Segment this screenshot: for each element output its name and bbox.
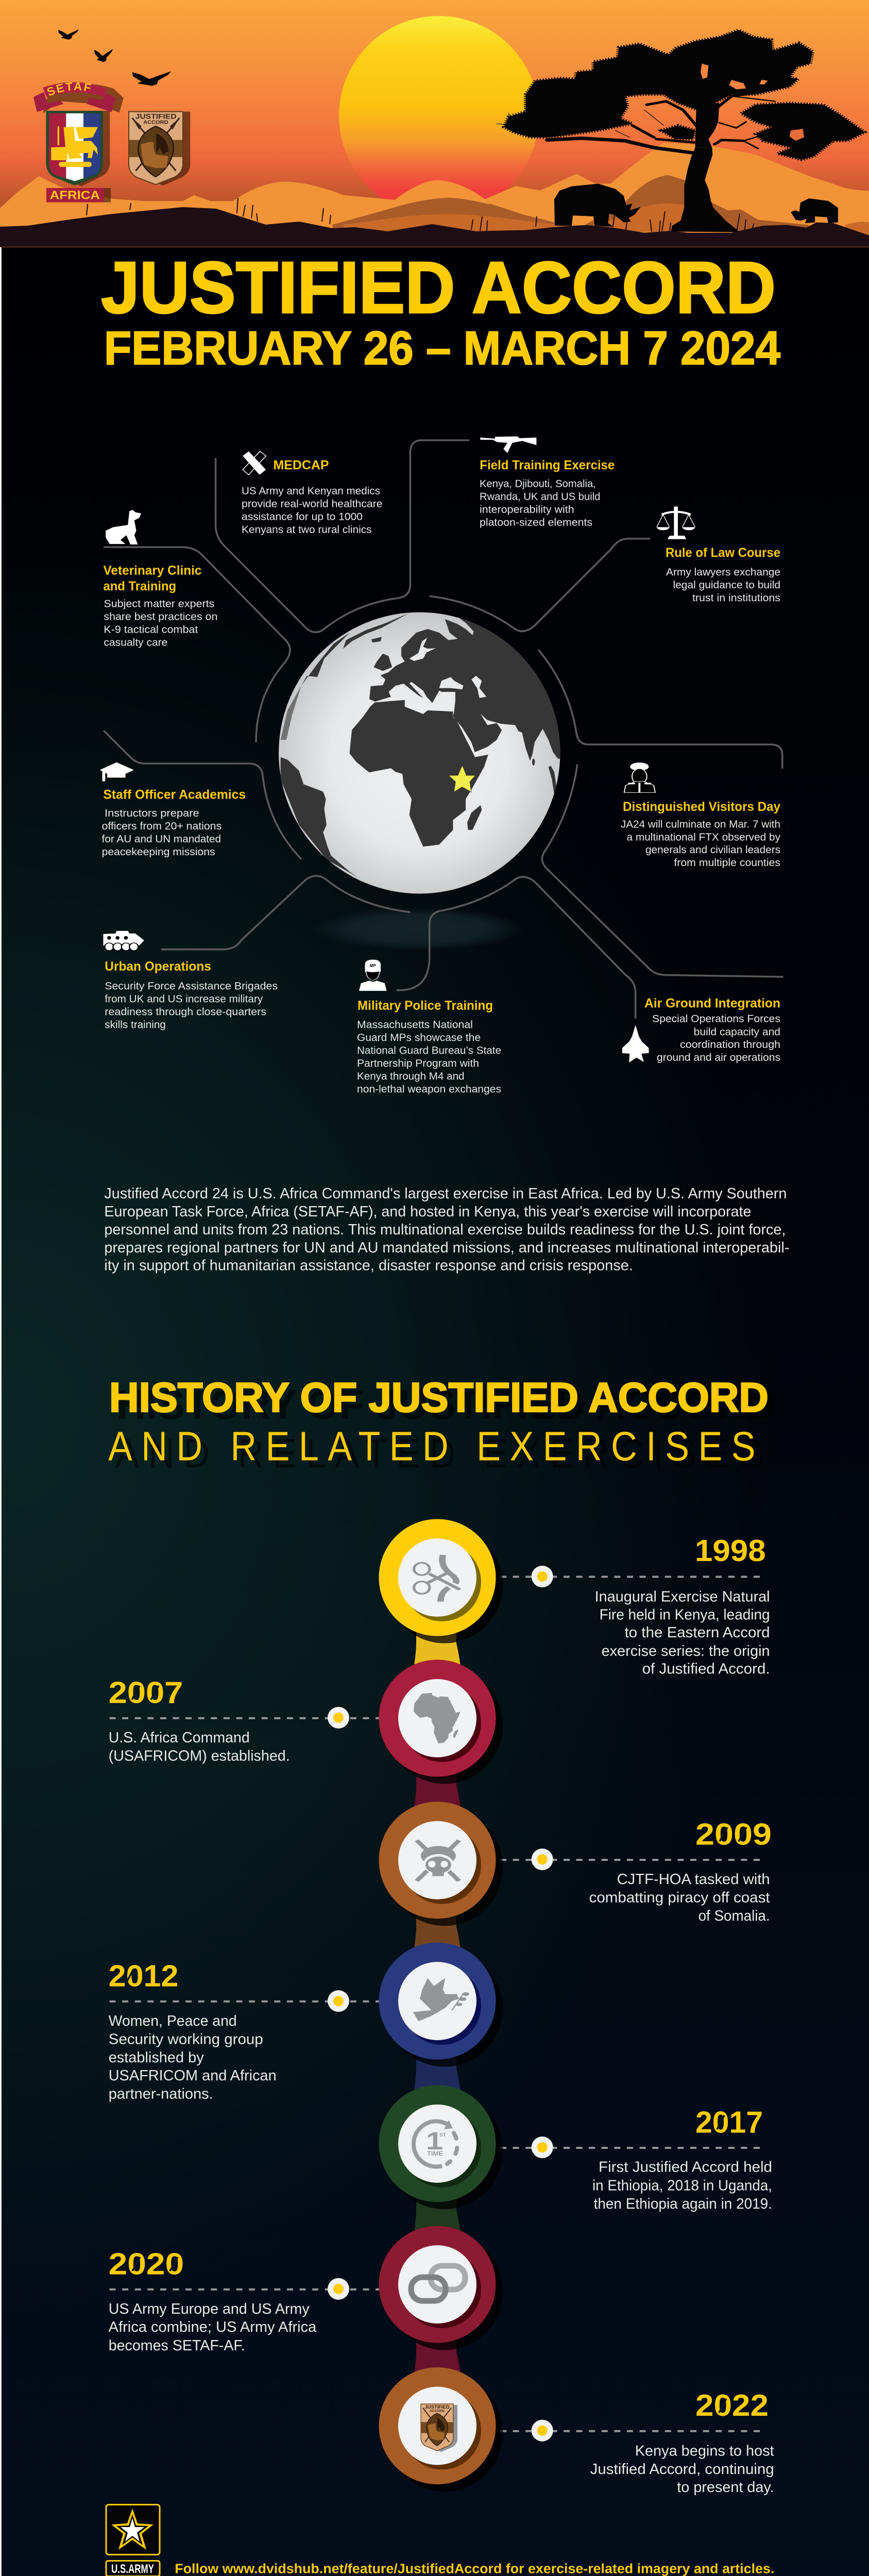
icon: armored vehicle xyxy=(103,931,144,951)
activity: Rule of Law Course: Army lawyers exchange xyxy=(666,567,780,578)
sun xyxy=(339,16,539,216)
activity: Field Training Exercise: Field Training Exercise xyxy=(480,458,615,472)
activity: Urban Operations: readiness through close-quarters xyxy=(105,1007,266,1018)
activity: MEDCAP: US Army and Kenyan medics xyxy=(242,485,380,497)
icon: first time arrow: 1 xyxy=(426,2128,443,2155)
timeline node: 2017 first time xyxy=(379,2085,503,2209)
timeline node: 2020 chain xyxy=(379,2226,503,2350)
tree and rhinos xyxy=(497,30,864,232)
inland seas xyxy=(410,638,486,698)
title xyxy=(101,247,780,375)
activity: Field Training Exercise: interoperability with xyxy=(480,504,574,516)
tree xyxy=(497,30,864,232)
activity: Rule of Law Course xyxy=(657,506,780,604)
icon: officer xyxy=(624,762,655,792)
grass xyxy=(87,198,754,232)
activity: Field Training Exercise: Rwanda, UK and US build xyxy=(480,492,600,503)
activity: Air Ground Integration: coordination through xyxy=(680,1039,780,1050)
timeline event: 2020: Africa combine; US Army Africa xyxy=(109,2319,317,2335)
timeline event: 2012: Women, Peace and xyxy=(109,2013,237,2029)
activity: Military Police Training: non-lethal weapon exchanges xyxy=(357,1083,501,1095)
timeline event: 2017 xyxy=(500,2106,772,2212)
Madagascar xyxy=(467,805,482,830)
US Army logo: U.S.ARMY xyxy=(111,2562,154,2576)
timeline event: 2007: (USAFRICOM) established. xyxy=(109,1748,290,1765)
header sunset illustration xyxy=(0,0,869,247)
activity: Veterinary Clinic and Training xyxy=(103,510,217,649)
timeline event: 2022: 2022 xyxy=(695,2388,769,2422)
timeline event: 2009: combatting piracy off coast xyxy=(589,1890,770,1906)
timeline node: 2007 Africa xyxy=(379,1660,503,1784)
timeline event: 2022: Justified Accord, continuing xyxy=(590,2461,774,2478)
Sri Lanka and Sumatra xyxy=(532,758,535,766)
icon: rifle xyxy=(480,436,536,453)
icon: first time arrow: ST xyxy=(439,2132,446,2138)
activity: Distinguished Visitors Day xyxy=(621,762,780,869)
timeline event: 1998: of Justified Accord. xyxy=(642,1661,770,1677)
South America xyxy=(281,757,359,878)
activity: MEDCAP: MEDCAP xyxy=(273,458,329,472)
timeline node: 1998 scissors xyxy=(379,1519,503,1643)
timeline event: 2017: First Justified Accord held xyxy=(599,2159,772,2176)
activity: Veterinary Clinic and Training: Veterinary Clinic xyxy=(103,564,202,578)
icon: military police officer xyxy=(359,960,387,991)
timeline event: 1998 xyxy=(500,1534,770,1677)
timeline event: 2009: of Somalia. xyxy=(698,1908,770,1924)
activity: Urban Operations: skills training xyxy=(105,1019,166,1030)
icon: dog xyxy=(106,510,141,545)
timeline event: 2012: established by xyxy=(109,2049,204,2066)
shield xyxy=(46,111,103,185)
activity: Military Police Training: Guard MPs showcase the xyxy=(357,1032,481,1043)
icon: pirate skull and swords xyxy=(417,1840,459,1881)
icon: bandages xyxy=(243,451,266,475)
timeline event: 2020: US Army Europe and US Army xyxy=(109,2301,310,2317)
Justified Accord patch: ACCORD xyxy=(143,120,168,126)
timeline event: 2009 xyxy=(500,1817,772,1924)
activity: Rule of Law Course: legal guidance to build xyxy=(673,580,780,591)
SETAF Africa patch xyxy=(33,82,124,202)
timeline event: 2022: Kenya begins to host xyxy=(635,2443,774,2460)
timeline event: 2022 xyxy=(500,2388,774,2496)
activity: Military Police Training xyxy=(357,960,501,1095)
globe floor shadow xyxy=(313,907,524,951)
activity: Military Police Training: National Guard Bureau’s State xyxy=(357,1045,501,1057)
Africa tab: AFRICA xyxy=(50,189,100,202)
activity: Air Ground Integration: build capacity and xyxy=(694,1026,780,1038)
Africa xyxy=(350,700,488,846)
timeline node: 2012 dove xyxy=(379,1942,503,2067)
activity: Staff Officer Academics: Staff Officer Academics xyxy=(103,788,246,802)
Justified Accord patch xyxy=(129,112,190,185)
timeline event: 2007: U.S. Africa Command xyxy=(109,1730,250,1746)
timeline event: 2012: USAFRICOM and African xyxy=(109,2067,277,2084)
icon: small Justified Accord patch xyxy=(421,2404,457,2452)
activity: Staff Officer Academics: Instructors prepare xyxy=(105,808,199,819)
timeline event: 2009: CJTF-HOA tasked with xyxy=(617,1871,770,1888)
activity: Urban Operations: Security Force Assistance Brigades xyxy=(105,980,278,992)
activity: Military Police Training: Military Police Training xyxy=(357,998,493,1013)
Iceland xyxy=(371,637,382,642)
history heading: HISTORY OF JUSTIFIED ACCORD xyxy=(109,1375,769,1421)
timeline event: 1998: Fire held in Kenya, leading xyxy=(600,1606,770,1623)
activity: Air Ground Integration xyxy=(622,996,780,1063)
Eurasia xyxy=(369,618,560,761)
activity: Distinguished Visitors Day: from multiple counties xyxy=(674,857,780,869)
timeline event: 2020: becomes SETAF-AF. xyxy=(109,2337,245,2354)
timeline event: 2017: then Ethiopia again in 2019. xyxy=(594,2196,772,2212)
icon: small Justified Accord patch: JUSTIFIED xyxy=(425,2404,450,2410)
activity: Field Training Exercise: Kenya, Djibouti, Somalia, xyxy=(480,479,596,490)
timeline event: 2020: 2020 xyxy=(109,2247,184,2281)
timeline event: 2012: Security working group xyxy=(109,2031,263,2047)
intro paragraph: ity in support of humanitarian assistance, disaster response and crisis response. xyxy=(104,1258,633,1274)
activity: Air Ground Integration: Special Operations Forces xyxy=(652,1013,780,1025)
timeline event: 2020 xyxy=(109,2247,381,2354)
timeline event: 2017: 2017 xyxy=(695,2106,763,2140)
activity: Military Police Training: Kenya through M4 and xyxy=(357,1071,465,1082)
timeline event: 1998: exercise series: the origin xyxy=(602,1643,770,1659)
icon: ribbon cutting scissors xyxy=(414,1555,460,1602)
activity: Rule of Law Course: trust in institutions xyxy=(692,592,780,604)
timeline event: 2009: 2009 xyxy=(695,1817,772,1851)
banner xyxy=(33,82,116,112)
history heading xyxy=(108,1375,776,1477)
activity: Distinguished Visitors Day: JA24 will culminate on Mar. 7 with xyxy=(621,819,780,830)
activity: Urban Operations xyxy=(103,931,278,1030)
timeline event: 2022: to present day. xyxy=(677,2479,774,2496)
title: JUSTIFIED ACCORD xyxy=(101,247,776,329)
intro paragraph: Justified Accord 24 is U.S. Africa Command's largest exercise in East Africa. Led by U.S. Army Southern xyxy=(104,1185,787,1202)
US Army logo xyxy=(106,2505,160,2576)
distant hills xyxy=(0,143,869,246)
timeline node: 2022 Justified Accord patch xyxy=(379,2367,503,2492)
Justified Accord patch: JUSTIFIED xyxy=(135,112,177,121)
icon: small Justified Accord patch: ACCORD xyxy=(430,2409,445,2413)
timeline connectors xyxy=(414,1623,461,2378)
icon: chain links xyxy=(411,2266,465,2301)
activity: Air Ground Integration: ground and air operations xyxy=(657,1052,780,1063)
activity: Military Police Training: Massachusetts National xyxy=(357,1019,473,1030)
Kenya star xyxy=(449,766,476,793)
activity: Distinguished Visitors Day: a multinational FTX observed by xyxy=(626,832,780,843)
intro paragraph: prepares regional partners for UN and AU mandated missions, and increases multinational interoperabil- xyxy=(104,1240,789,1256)
activity: Distinguished Visitors Day: generals and civilian leaders xyxy=(645,844,780,856)
banner: SETAF xyxy=(47,82,92,96)
icon: graduation cap xyxy=(100,762,134,781)
activity: Veterinary Clinic and Training: Subject matter experts xyxy=(104,599,214,610)
large rhino xyxy=(554,184,641,227)
UK xyxy=(373,654,392,671)
activity: MEDCAP: Kenyans at two rural clinics xyxy=(242,524,372,536)
history heading: AND RELATED EXERCISES xyxy=(108,1423,764,1469)
activity: Urban Operations: Urban Operations xyxy=(105,959,211,974)
activity: Staff Officer Academics: peacekeeping missions xyxy=(102,846,215,858)
activity: MEDCAP: provide real-world healthcare xyxy=(242,499,383,510)
activity: Military Police Training: Partnership Program with xyxy=(357,1058,479,1070)
activity: Urban Operations: from UK and US increase military xyxy=(105,994,263,1005)
timeline event: 2017: in Ethiopia, 2018 in Uganda, xyxy=(592,2177,772,2194)
icon: first time arrow: TIME xyxy=(427,2150,443,2157)
icon: Africa map xyxy=(414,1693,460,1743)
activity: Veterinary Clinic and Training: casualty care xyxy=(104,637,167,649)
activity: Veterinary Clinic and Training: share best practices on xyxy=(104,612,217,623)
timeline event: 1998: 1998 xyxy=(695,1534,766,1568)
timeline event: 2007: 2007 xyxy=(109,1675,183,1709)
icon: fighter jet xyxy=(622,1025,649,1063)
date subtitle: FEBRUARY 26 – MARCH 7 2024 xyxy=(104,322,780,375)
timeline event: 2012: partner-nations. xyxy=(109,2086,213,2103)
intro paragraph xyxy=(104,1185,789,1274)
icon: scales xyxy=(657,506,695,539)
timeline node: 2009 pirate skull xyxy=(379,1802,503,1926)
icon: dove with olive branch xyxy=(413,1978,469,2021)
activity: Field Training Exercise: platoon-sized elements xyxy=(480,517,592,529)
activity: MEDCAP: assistance for up to 1000 xyxy=(242,511,363,522)
activity: Field Training Exercise xyxy=(480,436,615,529)
Greenland and arctic xyxy=(343,613,410,649)
connector lines around globe xyxy=(104,440,783,1019)
globe xyxy=(279,604,580,894)
activity: MEDCAP xyxy=(242,451,383,536)
activity: Veterinary Clinic and Training: and Training xyxy=(103,579,176,594)
history heading: AND RELATED EXERCISES xyxy=(115,1431,772,1477)
icon: military police officer: MP xyxy=(370,963,376,968)
activity: Rule of Law Course: Rule of Law Course xyxy=(666,546,780,560)
activity: Air Ground Integration: Air Ground Integration xyxy=(644,996,780,1011)
timeline event: 1998: to the Eastern Accord xyxy=(625,1624,770,1641)
birds xyxy=(58,29,171,86)
timeline event: 2012: 2012 xyxy=(109,1959,178,1993)
activity: Staff Officer Academics: for AU and UN mandated xyxy=(102,834,221,845)
footer call to action: Follow www.dvidshub.net/feature/JustifiedAccord for exercise-related imagery and articles. xyxy=(175,2562,774,2576)
intro paragraph: European Task Force, Africa (SETAF-AF), and hosted in Kenya, this year's exercise will incorporate xyxy=(104,1204,751,1220)
intro paragraph: personnel and units from 23 nations. This multinational exercise builds readiness for the U.S. joint force, xyxy=(104,1222,786,1238)
activity: Staff Officer Academics xyxy=(100,762,246,858)
activity: Veterinary Clinic and Training: K-9 tactical combat xyxy=(104,624,198,636)
activity: Distinguished Visitors Day: Distinguished Visitors Day xyxy=(623,800,780,814)
timeline event: 2007 xyxy=(109,1675,381,1765)
timeline event: 1998: Inaugural Exercise Natural xyxy=(595,1589,770,1605)
icon: first time arrow xyxy=(414,2120,457,2166)
history heading: HISTORY OF JUSTIFIED ACCORD xyxy=(116,1382,776,1428)
timeline event: 2012 xyxy=(109,1959,381,2103)
ground silhouette xyxy=(0,207,869,247)
small rhino xyxy=(791,198,838,223)
activity: Staff Officer Academics: officers from 20+ nations xyxy=(102,821,221,832)
